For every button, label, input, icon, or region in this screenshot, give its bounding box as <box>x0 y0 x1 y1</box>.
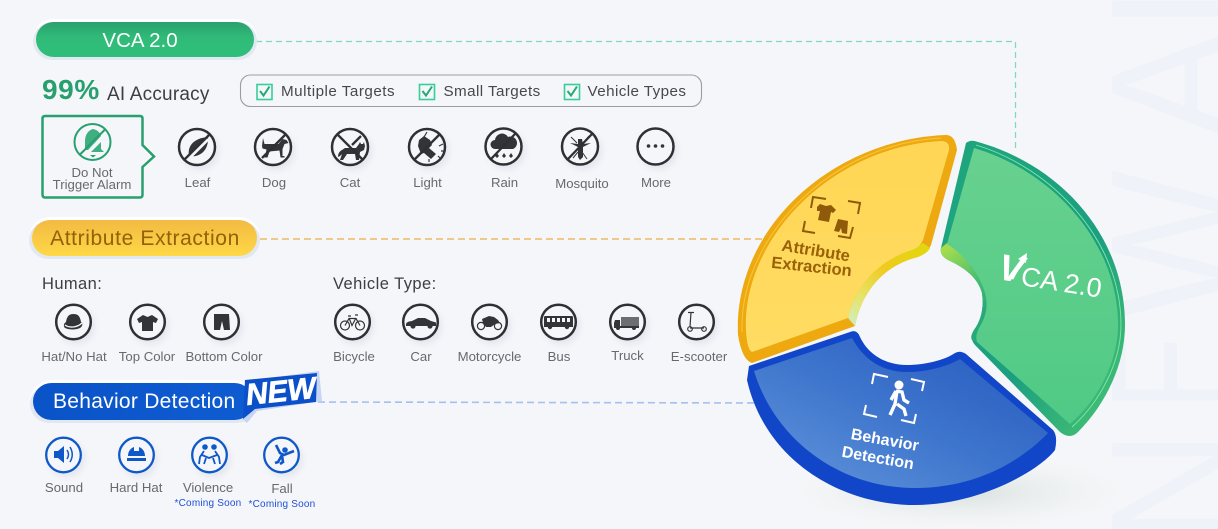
callout: Do Not Trigger Alarm: Trigger Alarm <box>53 177 131 192</box>
icon: Violence <box>175 438 241 509</box>
icon: Leaf: Leaf <box>185 175 211 190</box>
badge: NEW: NEW <box>244 372 320 412</box>
pill: Attribute Extraction <box>29 217 260 259</box>
icon: Truck: Truck <box>611 348 644 363</box>
icon: clothing frame <box>803 197 860 238</box>
connector: Attribute Extraction <box>260 238 766 240</box>
check: Vehicle Types: Vehicle Types <box>588 83 686 100</box>
icon: Hat/No Hat: Hat/No Hat <box>41 349 107 364</box>
brand label: V <box>996 246 1030 291</box>
segment: Behavior Detection: Detection <box>840 444 915 473</box>
watermark: NEW AI <box>1074 0 1218 529</box>
pill: VCA 2.0 <box>33 19 257 60</box>
icon: Bottom Color: Bottom Color <box>186 349 263 364</box>
icon: Mosquito <box>555 128 609 191</box>
icon: Violence: Violence <box>183 480 233 495</box>
icon: Sound: Sound <box>45 480 83 495</box>
segment: VCA 2.0 <box>941 141 1125 436</box>
label: Attribute <box>780 237 851 265</box>
icon: Rain <box>486 128 522 190</box>
callout: Do Not Trigger Alarm <box>42 116 154 198</box>
connector: VCA 2.0 <box>256 42 1016 152</box>
segment: Behavior Detection <box>747 331 1056 505</box>
heading: Vehicle Type: Vehicle Type: <box>333 275 437 293</box>
pill: Behavior Detection: Behavior Detection <box>53 390 235 413</box>
icon: Car <box>403 305 438 364</box>
pill: Behavior Detection <box>30 380 256 423</box>
icon: Bus <box>541 305 576 364</box>
pill: VCA 2.0: VCA 2.0 <box>102 29 178 52</box>
icon: Motorcycle: Motorcycle <box>458 349 521 364</box>
icon: Hat/No Hat <box>41 305 107 364</box>
icon: Motorcycle <box>458 305 521 364</box>
icon: Cat: Cat <box>340 175 361 190</box>
icon: Fall: *Coming Soon <box>249 499 315 510</box>
stat: 99% AI Accuracy <box>42 74 210 105</box>
icon: Violence: *Coming Soon <box>175 498 241 509</box>
check: Multiple Targets: Multiple Targets <box>281 83 395 100</box>
check: Small Targets: Small Targets <box>444 83 541 100</box>
callout: Do Not Trigger Alarm: Do Not <box>71 165 113 180</box>
icon: Fall: Fall <box>271 481 293 496</box>
icon: Cat <box>332 129 368 190</box>
stat: 99% AI Accuracy: AI Accuracy <box>107 84 210 105</box>
icon: Bicycle <box>333 305 375 364</box>
icon: Dog <box>255 129 291 190</box>
icon: Top Color: Top Color <box>119 349 176 364</box>
icon: Light: Light <box>413 175 442 190</box>
segment: Attribute Extraction: Extraction <box>770 254 853 280</box>
icon: Hard Hat: Hard Hat <box>110 480 163 495</box>
panel: target checklist <box>240 75 702 106</box>
icon: Truck <box>610 305 645 363</box>
chart: segmented ring <box>738 135 1130 529</box>
icon: Bottom Color <box>186 305 263 364</box>
icon: E-scooter: E-scooter <box>671 349 728 364</box>
icon: More <box>638 128 674 190</box>
icon: Mosquito: Mosquito <box>555 176 609 191</box>
icon: Bus: Bus <box>548 349 571 364</box>
stat: 99% AI Accuracy: 99% <box>42 74 100 105</box>
icon: Leaf <box>179 129 215 190</box>
icon: Car: Car <box>410 349 432 364</box>
icon: Top Color <box>119 305 176 364</box>
icon: Light <box>409 129 445 190</box>
heading: Human: Human: <box>42 275 102 293</box>
icon: Dog: Dog <box>262 175 286 190</box>
icon: Sound <box>45 438 83 495</box>
icon: Bicycle: Bicycle <box>333 349 375 364</box>
icon: Hard Hat <box>110 438 163 495</box>
segment: Attribute Extraction <box>738 135 957 363</box>
icon: Rain: Rain <box>491 175 518 190</box>
pill: Attribute Extraction: Attribute Extraction <box>50 227 240 250</box>
icon: Fall <box>249 438 315 510</box>
icon: walking person frame <box>864 374 924 423</box>
ground shadow <box>790 454 1130 529</box>
icon: More: More <box>641 175 671 190</box>
connector: Behavior Detection <box>318 402 766 403</box>
label: Behavior <box>850 426 920 455</box>
segment: VCA 2.0: CA 2.0 <box>1019 261 1104 304</box>
icon: E-scooter <box>671 305 728 364</box>
